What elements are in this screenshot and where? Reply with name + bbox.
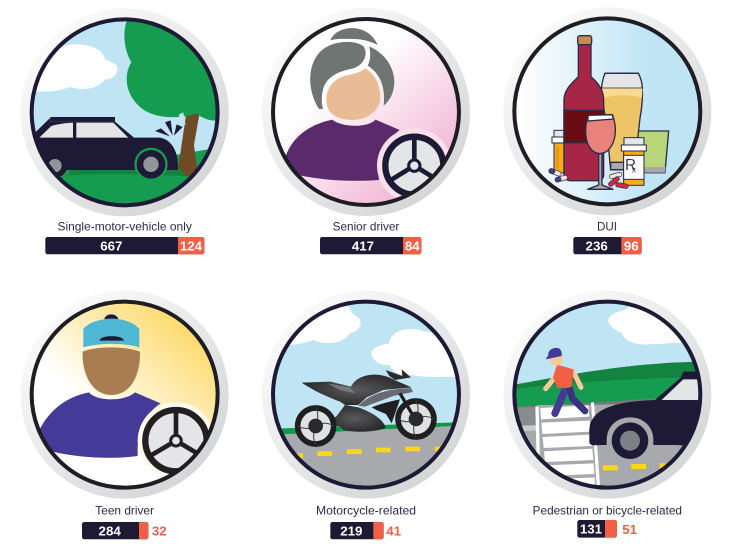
bar: 417 and 84: 84 (405, 238, 420, 253)
illustration: pedestrian and car (516, 304, 698, 486)
bar: 284 and 32 (82, 522, 167, 539)
bar: 667 and 124: 124 (180, 238, 203, 253)
icon: wine glass (586, 115, 615, 189)
illustration: car hitting a tree (34, 21, 216, 204)
panel: DUI (503, 7, 711, 254)
icon: capsules (548, 168, 629, 189)
badge halo (503, 291, 711, 499)
icon: steering wheel (138, 402, 214, 479)
illustration: teen driver (34, 304, 216, 486)
badge halo (21, 291, 229, 499)
badge ring (32, 19, 218, 205)
badge ring (32, 302, 218, 488)
icon: steering wheel (377, 128, 448, 198)
bar: 219 and 41: 41 (386, 524, 402, 539)
panel: single-motor-vehicle only (21, 8, 229, 254)
bar: 667 and 124 (45, 237, 204, 254)
badge ring (514, 302, 700, 488)
bar: 236 and 96 (573, 237, 642, 254)
panel: motorcycle-related (262, 291, 470, 539)
icon: pedestrian (546, 348, 585, 413)
bar: 131 and 51: 51 (622, 522, 638, 537)
bar: 284 and 32: 32 (152, 524, 167, 539)
road lane markings (288, 447, 450, 458)
label: Senior driver (333, 221, 399, 234)
icon: shot glass (636, 131, 669, 173)
panel: senior driver (262, 8, 470, 254)
bar: 417 and 84: 417 (352, 238, 374, 253)
label: Pedestrian or bicycle-related (533, 505, 682, 518)
bar: 284 and 32: 284 (99, 523, 121, 538)
icon: wine bottle (564, 36, 604, 181)
bar: 667 and 124: 667 (100, 238, 122, 253)
illustration: senior driver (275, 21, 457, 203)
prescription subscript: x (632, 165, 637, 175)
icon: motorcycle (297, 369, 434, 444)
badge halo (262, 8, 470, 216)
bar: 219 and 41 (330, 522, 402, 539)
icon: car front (589, 372, 708, 459)
badge halo (21, 8, 229, 216)
panel: pedestrian or bicycle-related (503, 291, 711, 538)
icon: pill bottle behind (552, 130, 565, 173)
illustration: alcohol and pills (516, 20, 698, 202)
badge ring (273, 19, 459, 205)
icon: beer glass (602, 73, 642, 170)
prescription symbol: R (625, 157, 636, 174)
label: Motorcycle-related (316, 505, 416, 518)
icon: impact marks (155, 120, 183, 136)
badge ring (514, 18, 700, 204)
bar: 131 and 51 (577, 520, 638, 538)
panel: teen driver (21, 291, 229, 539)
label: Teen driver (95, 505, 154, 518)
crosswalk stripes (540, 405, 595, 490)
bar: 417 and 84 (320, 237, 421, 254)
label: DUI (597, 221, 617, 234)
icon: prescription bottle (621, 138, 646, 185)
bar: 236 and 96: 96 (624, 238, 639, 253)
bar: 236 and 96: 236 (586, 238, 608, 253)
bar: 131 and 51: 131 (580, 522, 603, 537)
badge halo (262, 291, 470, 499)
bar: 219 and 41: 219 (340, 523, 362, 538)
badge ring (273, 302, 459, 488)
road lane markings (603, 463, 674, 470)
label: Single-motor-vehicle only (57, 221, 192, 234)
illustration: motorcycle on road (275, 304, 457, 486)
badge halo (503, 7, 711, 215)
